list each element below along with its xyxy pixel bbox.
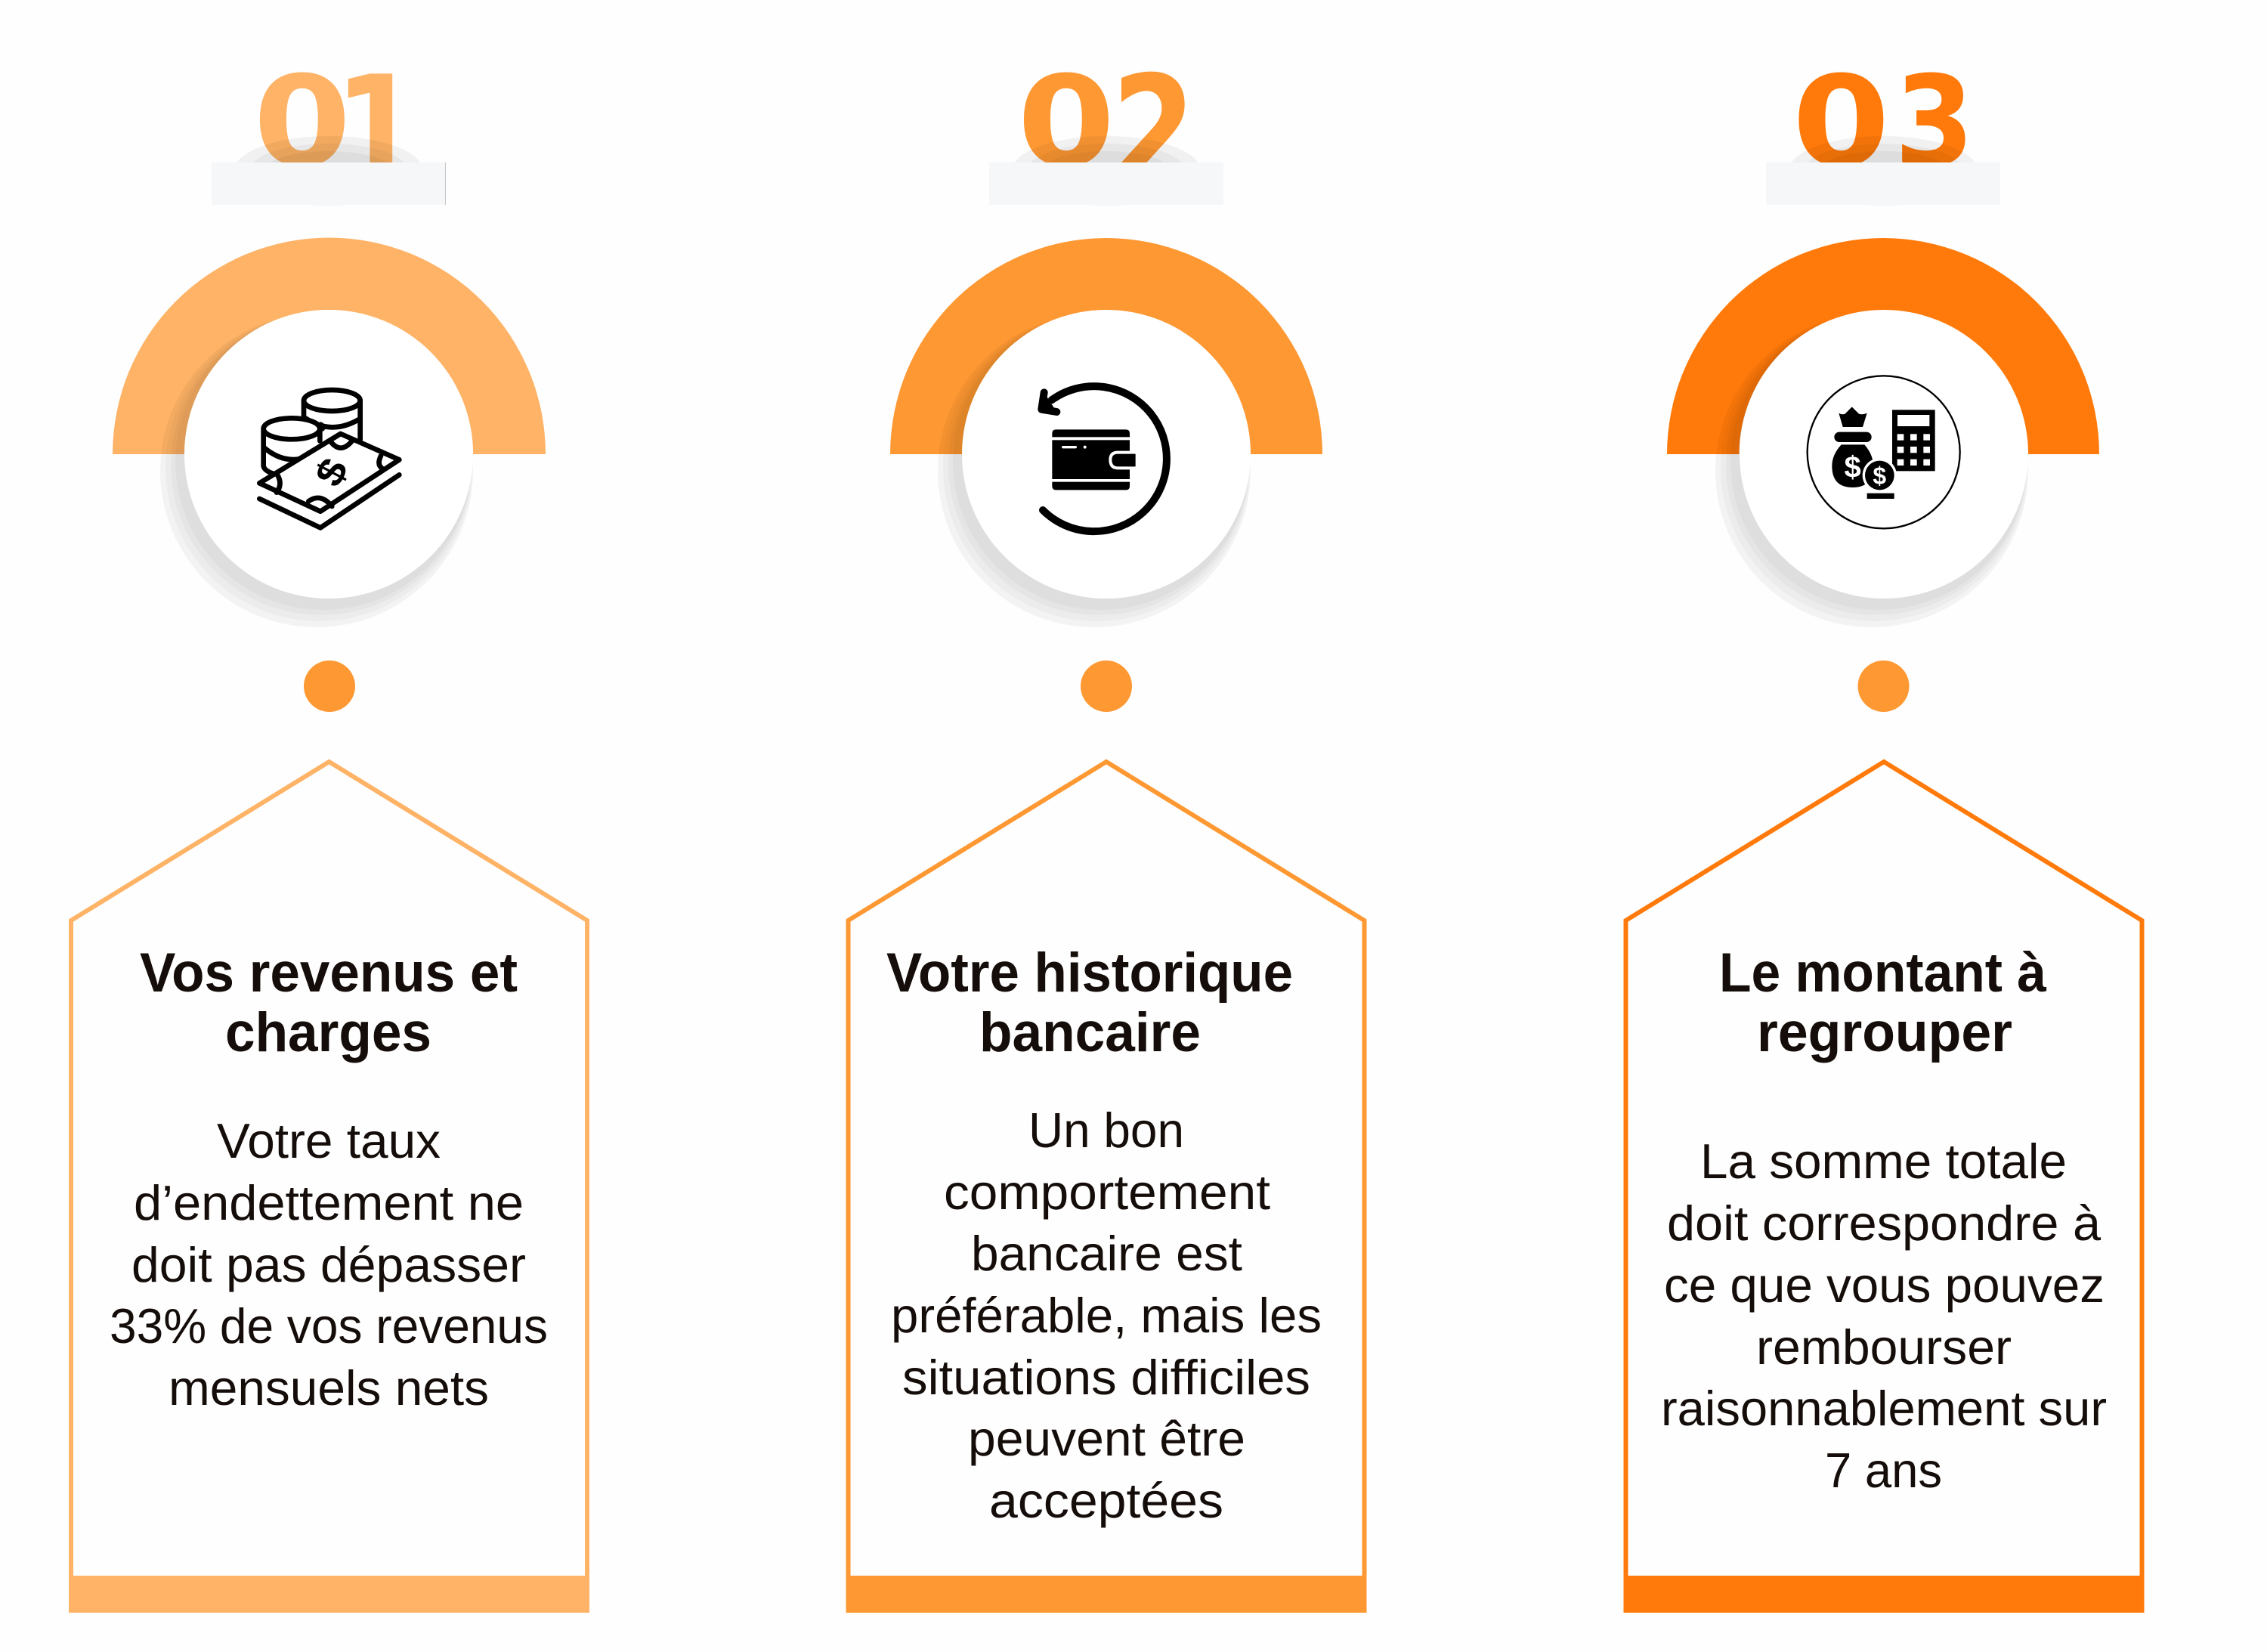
body text: 7 ans (1825, 1443, 1942, 1498)
body text: Votre taux (217, 1113, 441, 1168)
icon: coins and banknote: $ (306, 451, 357, 493)
body text: raisonnablement sur (1661, 1381, 2107, 1436)
number 01: 0 (253, 49, 351, 194)
heading: charges (225, 1002, 431, 1063)
body text: rembourser (1756, 1319, 2012, 1375)
white circle (184, 310, 473, 599)
body text: peuvent être (968, 1411, 1245, 1466)
body text: Un bon (1028, 1103, 1184, 1158)
icon: coins and banknote (259, 390, 399, 527)
semicircle arc (890, 238, 1322, 454)
heading (140, 942, 518, 1063)
heading: Votre historique (886, 942, 1293, 1004)
circle shadow (1715, 314, 2028, 627)
number 03: 0 (1792, 49, 1890, 194)
body text: doit pas dépasser (131, 1237, 526, 1292)
number 02: 0 (1017, 49, 1115, 194)
body text (1661, 1134, 2107, 1498)
number 02 (989, 43, 1223, 219)
timeline dot (1081, 660, 1132, 712)
semicircle arc (1667, 238, 2099, 454)
body text (891, 1103, 1322, 1528)
body text: bancaire est (971, 1226, 1242, 1281)
number 03 (1766, 49, 2000, 206)
number 03: 3 (1894, 50, 1975, 195)
heading (886, 942, 1293, 1063)
number 02: 2 (1112, 43, 1195, 219)
circle shadow (160, 314, 473, 627)
white circle (962, 310, 1251, 599)
white circle (1740, 310, 2028, 599)
body text: ce que vous pouvez (1664, 1258, 2105, 1313)
number 01: 1 (334, 45, 422, 218)
heading: regrouper (1757, 1002, 2012, 1063)
body text (110, 1113, 548, 1415)
body text: doit correspondre à (1667, 1196, 2102, 1251)
circle shadow (938, 314, 1251, 627)
panel: column 3 montant a regrouper (1623, 49, 2145, 1613)
heading: bancaire (979, 1002, 1201, 1063)
icon: money bag and calculator (1808, 376, 1960, 528)
body text: d’endettement ne (134, 1175, 524, 1230)
panel: column 2 historique bancaire (846, 43, 1366, 1613)
house card (846, 762, 1366, 1613)
number 01 (212, 45, 446, 218)
heading: Le montant à (1719, 942, 2046, 1004)
heading (1719, 942, 2046, 1063)
icon: wallet with return arrow (1041, 386, 1167, 531)
house card (1623, 762, 2145, 1613)
body text: La somme totale (1700, 1134, 2067, 1189)
semicircle arc (113, 238, 546, 454)
body text: mensuels nets (169, 1360, 489, 1415)
body text: situations difficiles (902, 1350, 1310, 1405)
body text: comportement (944, 1165, 1270, 1220)
panel: column 1 revenus et charges (69, 45, 589, 1613)
heading: Vos revenus et (140, 942, 518, 1004)
timeline dot (304, 660, 355, 712)
body text: 33% de vos revenus (110, 1298, 548, 1353)
body text: préférable, mais les (891, 1288, 1322, 1343)
icon: money bag and calculator: $ (1845, 451, 1861, 484)
icon: money bag and calculator: $ (1873, 462, 1886, 490)
timeline dot (1857, 660, 1909, 712)
body text: acceptées (989, 1473, 1223, 1528)
house card (69, 762, 589, 1613)
